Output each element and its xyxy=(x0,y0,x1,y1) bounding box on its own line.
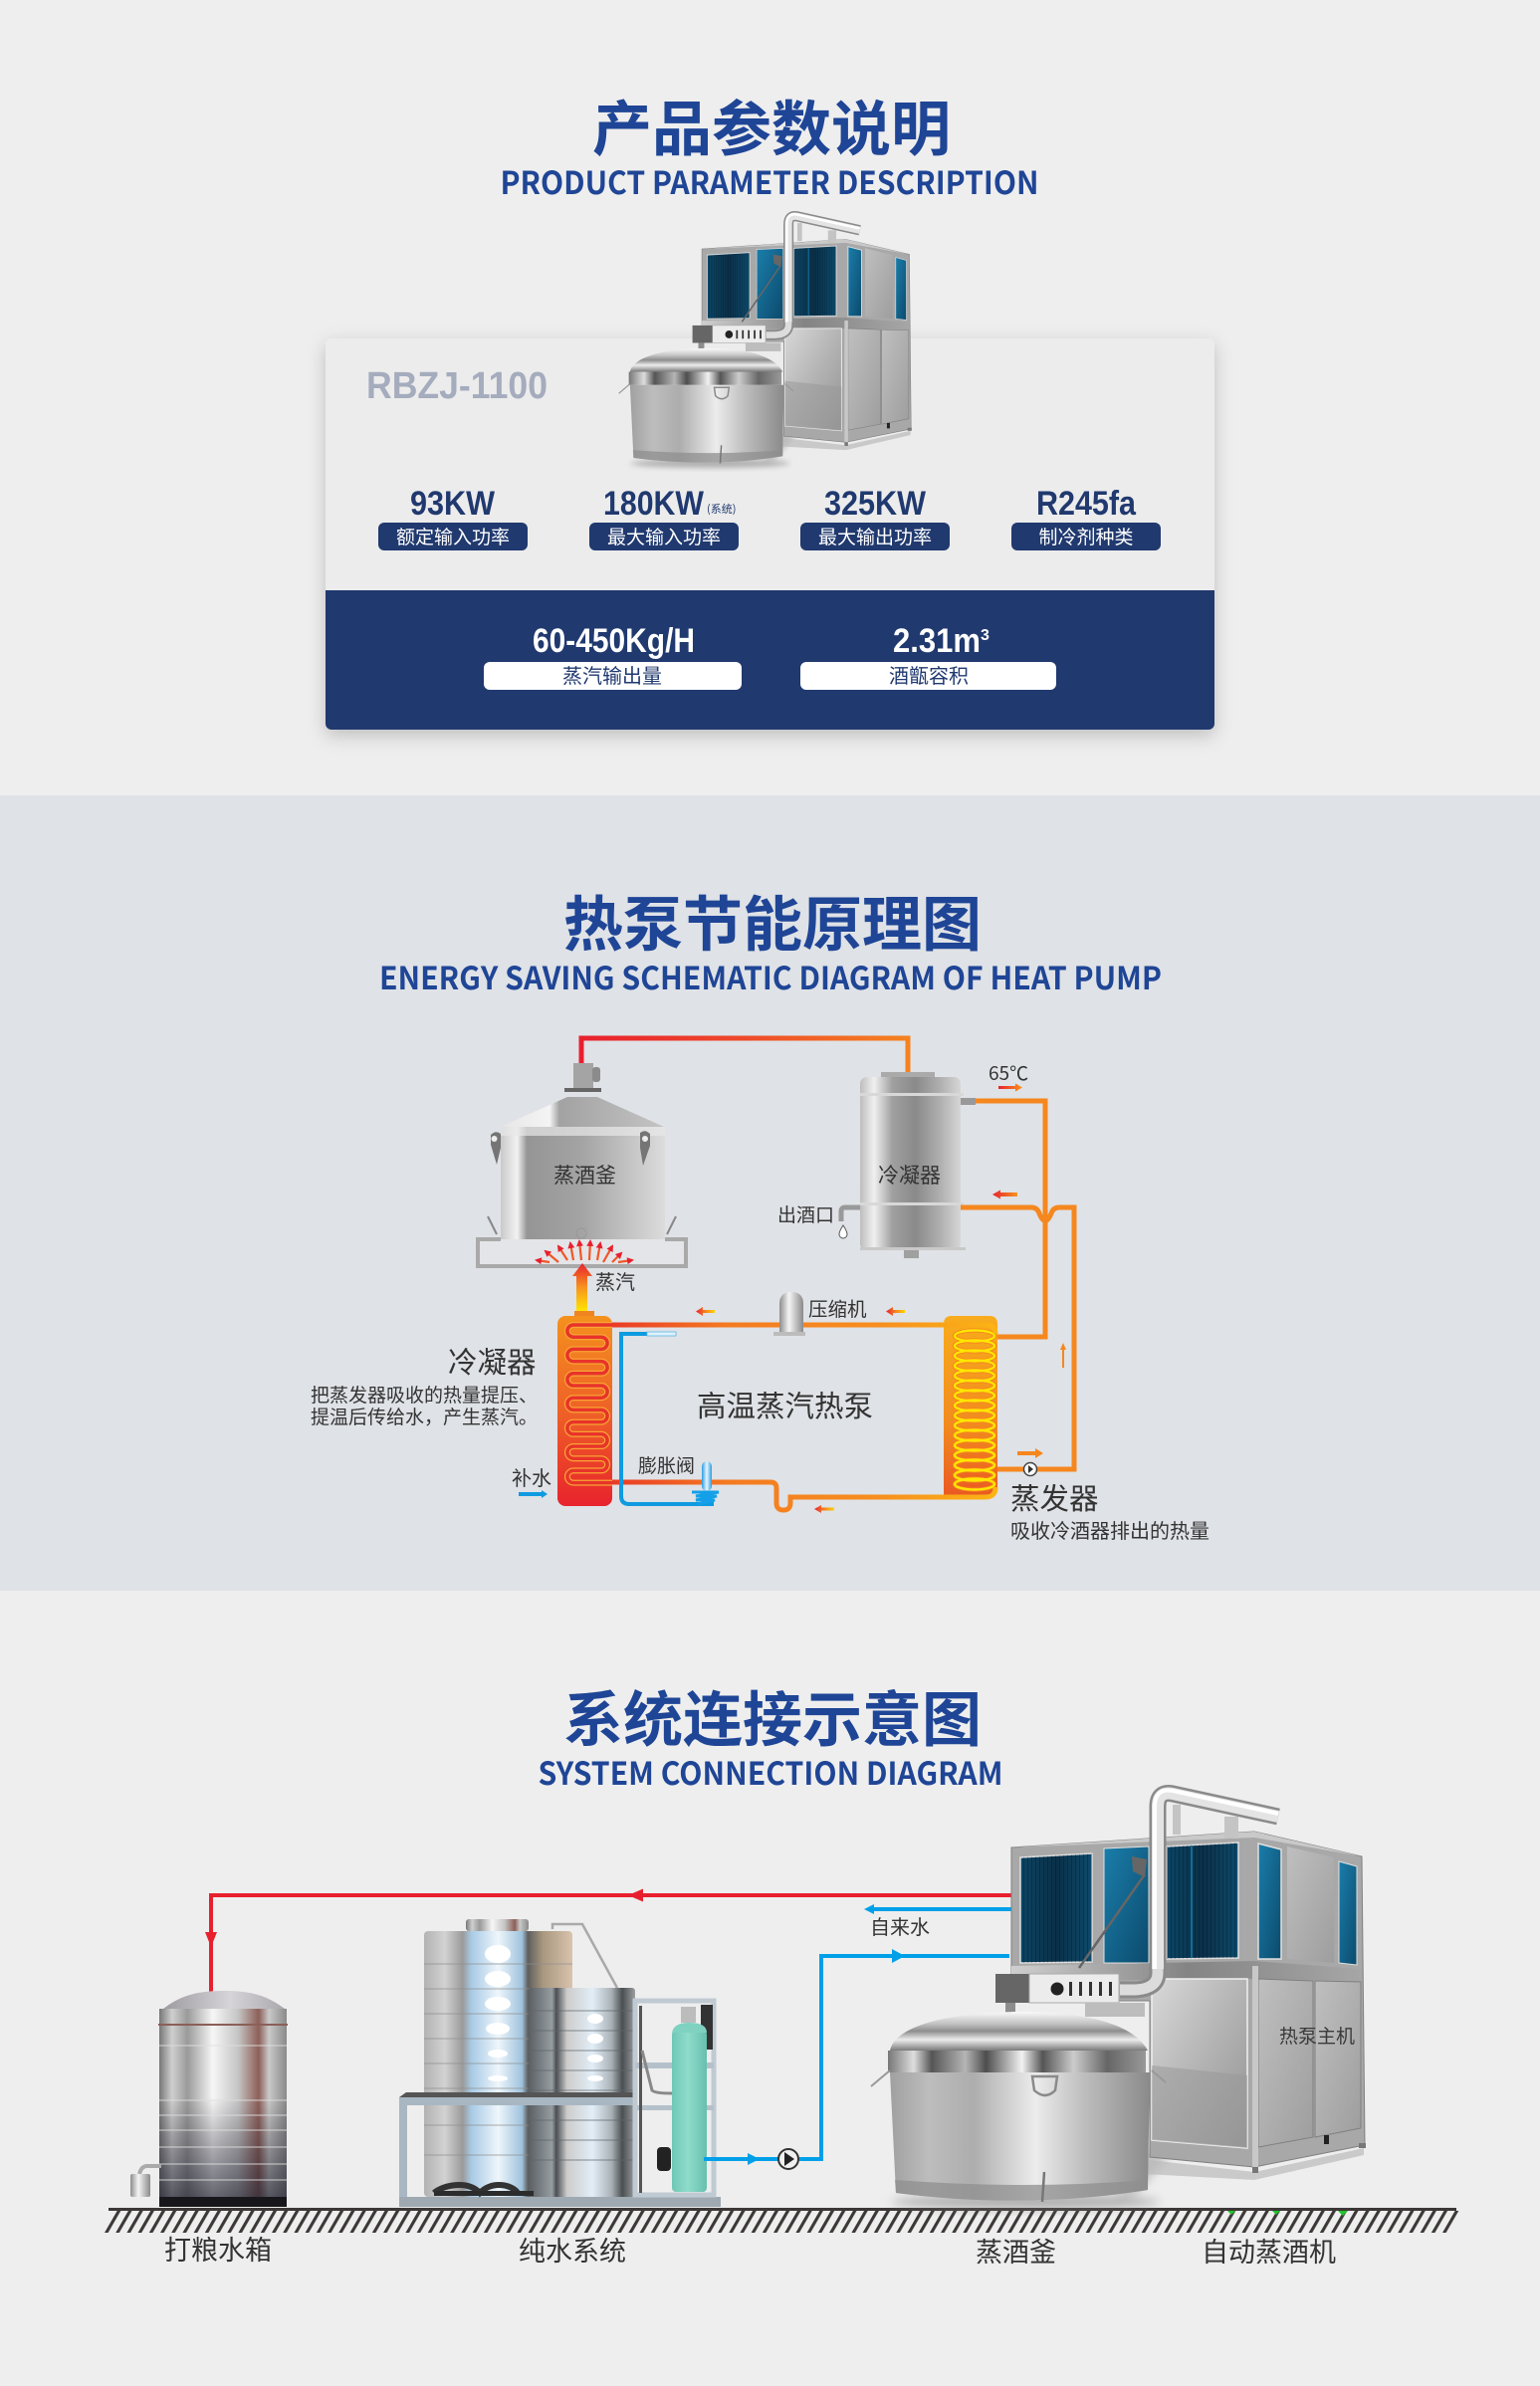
icon: compressor xyxy=(773,1292,867,1336)
label: evaporator note xyxy=(1010,1476,1210,1544)
stat: rated input power: 93KW xyxy=(410,485,496,523)
heading: product parameters: 产品参数说明 xyxy=(592,82,951,168)
pipe: red outlet xyxy=(205,1889,1011,1998)
stat: steam output xyxy=(484,622,742,690)
icon: alcohol condenser: 出酒口 xyxy=(777,1200,834,1227)
label: evaporator note: 蒸发器 xyxy=(1010,1476,1099,1518)
pipe: refrigerant top xyxy=(612,1325,995,1334)
label: condenser note: 提温后传给水，产生蒸汽。 xyxy=(311,1403,538,1429)
stat: max output power: 最大输出功率 xyxy=(818,523,932,549)
product image: distilling machine xyxy=(619,214,912,468)
stat: rated input power xyxy=(378,485,528,550)
stat: still volume: 3 xyxy=(981,627,990,644)
icon: expansion valve: 膨胀阀 xyxy=(638,1451,695,1478)
heading: product parameters: PRODUCT PARAMETER DESCRIPTION xyxy=(500,158,1039,204)
stat: steam output: 蒸汽输出量 xyxy=(562,660,662,689)
ground xyxy=(99,2208,1460,2233)
arrow: right xyxy=(1017,1448,1043,1458)
heading: energy saving schematic: ENERGY SAVING SCHEMATIC DIAGRAM OF HEAT PUMP xyxy=(379,954,1162,999)
icon: heating trough xyxy=(478,1239,686,1266)
icon: heat pump condenser xyxy=(557,1311,612,1506)
pipe: blue supply xyxy=(704,1949,1009,2169)
arrow: hot water xyxy=(992,1191,1017,1198)
heading: energy saving schematic xyxy=(379,877,1162,999)
stat: max output power xyxy=(800,485,950,550)
stat: max input power: 最大输入功率 xyxy=(607,523,721,549)
icon: pure water system xyxy=(399,1919,721,2207)
product image: full system machine xyxy=(871,1791,1366,2209)
label: auto distiller: 自动蒸酒机 xyxy=(1202,2231,1336,2270)
label: condenser note xyxy=(311,1340,538,1429)
icon: compressor: 压缩机 xyxy=(808,1293,867,1322)
heading: system connection: SYSTEM CONNECTION DIAGRAM xyxy=(538,1749,1003,1795)
label: 65C: 65℃ xyxy=(989,1059,1028,1086)
pipe: still to condenser xyxy=(581,1038,908,1073)
pipe: tap water xyxy=(864,1904,1012,1940)
arrow: steam: 蒸汽 xyxy=(595,1266,635,1295)
stat: max input power: (系统) xyxy=(707,501,736,517)
icon: still xyxy=(488,1063,676,1241)
stat: max output power: 325KW xyxy=(824,485,927,523)
stat: refrigerant: R245fa xyxy=(1036,485,1137,523)
label: evaporator note: 吸收冷酒器排出的热量 xyxy=(1010,1515,1210,1544)
label: condenser note: 把蒸发器吸收的热量提压、 xyxy=(311,1381,538,1408)
pipe: refrigerant bottom xyxy=(612,1482,995,1510)
icon: alcohol condenser xyxy=(777,1072,976,1258)
heading: energy saving schematic: 热泵节能原理图 xyxy=(563,877,982,964)
stat: still volume xyxy=(800,622,1056,690)
icon: pump xyxy=(778,2149,798,2169)
stat: still volume: 酒甑容积 xyxy=(889,660,969,689)
icon: evaporator xyxy=(944,1316,997,1495)
model name: RBZJ-1100 xyxy=(366,365,548,407)
stat: refrigerant: 制冷剂种类 xyxy=(1038,523,1134,549)
diagram: system connection xyxy=(99,1791,1460,2270)
stat: still volume: 2.31m xyxy=(893,622,981,660)
icon: pump xyxy=(1023,1463,1037,1475)
label: condenser note: 冷凝器 xyxy=(448,1340,537,1382)
stat: max input power: 180KW xyxy=(603,485,705,523)
label: still: 蒸酒釜 xyxy=(553,1160,616,1190)
spout xyxy=(841,1207,860,1221)
icon: alcohol condenser: 冷凝器 xyxy=(878,1160,941,1190)
pipe: expansion line xyxy=(621,1332,714,1504)
heading: system connection: 系统连接示意图 xyxy=(563,1672,982,1759)
cabinet xyxy=(635,2001,714,2195)
stat: steam output: 60-450Kg/H xyxy=(533,622,695,660)
label: still: 蒸酒釜 xyxy=(976,2231,1056,2270)
icon: radiating heat arrows xyxy=(537,1241,632,1262)
label: pure water system: 纯水系统 xyxy=(519,2230,626,2269)
label: mash water tank: 打粮水箱 xyxy=(164,2229,272,2268)
heading: product parameters xyxy=(500,82,1039,204)
chart: heat pump schematic xyxy=(311,1038,1210,1544)
arrow: up xyxy=(1060,1343,1066,1368)
rack xyxy=(399,2092,633,2097)
icon: expansion valve xyxy=(638,1451,719,1504)
panel: parameter card xyxy=(326,338,1214,730)
pipe: condenser to evaporator loops xyxy=(961,1101,1074,1469)
label: heat pump host: 热泵主机 xyxy=(1279,2022,1355,2049)
heading: system connection xyxy=(538,1672,1003,1795)
stat: max input power xyxy=(589,485,739,550)
arrow: steam xyxy=(572,1263,635,1312)
stat: rated input power: 额定输入功率 xyxy=(396,523,510,549)
icon: mash water tank xyxy=(130,1991,288,2207)
stat: refrigerant xyxy=(1011,485,1161,550)
label: makeup water: 补水 xyxy=(512,1462,551,1491)
arrow: refrigerant flow xyxy=(696,1307,905,1513)
label: heat pump: 高温蒸汽热泵 xyxy=(697,1384,873,1425)
pipe: tap water: 自来水 xyxy=(870,1911,930,1940)
